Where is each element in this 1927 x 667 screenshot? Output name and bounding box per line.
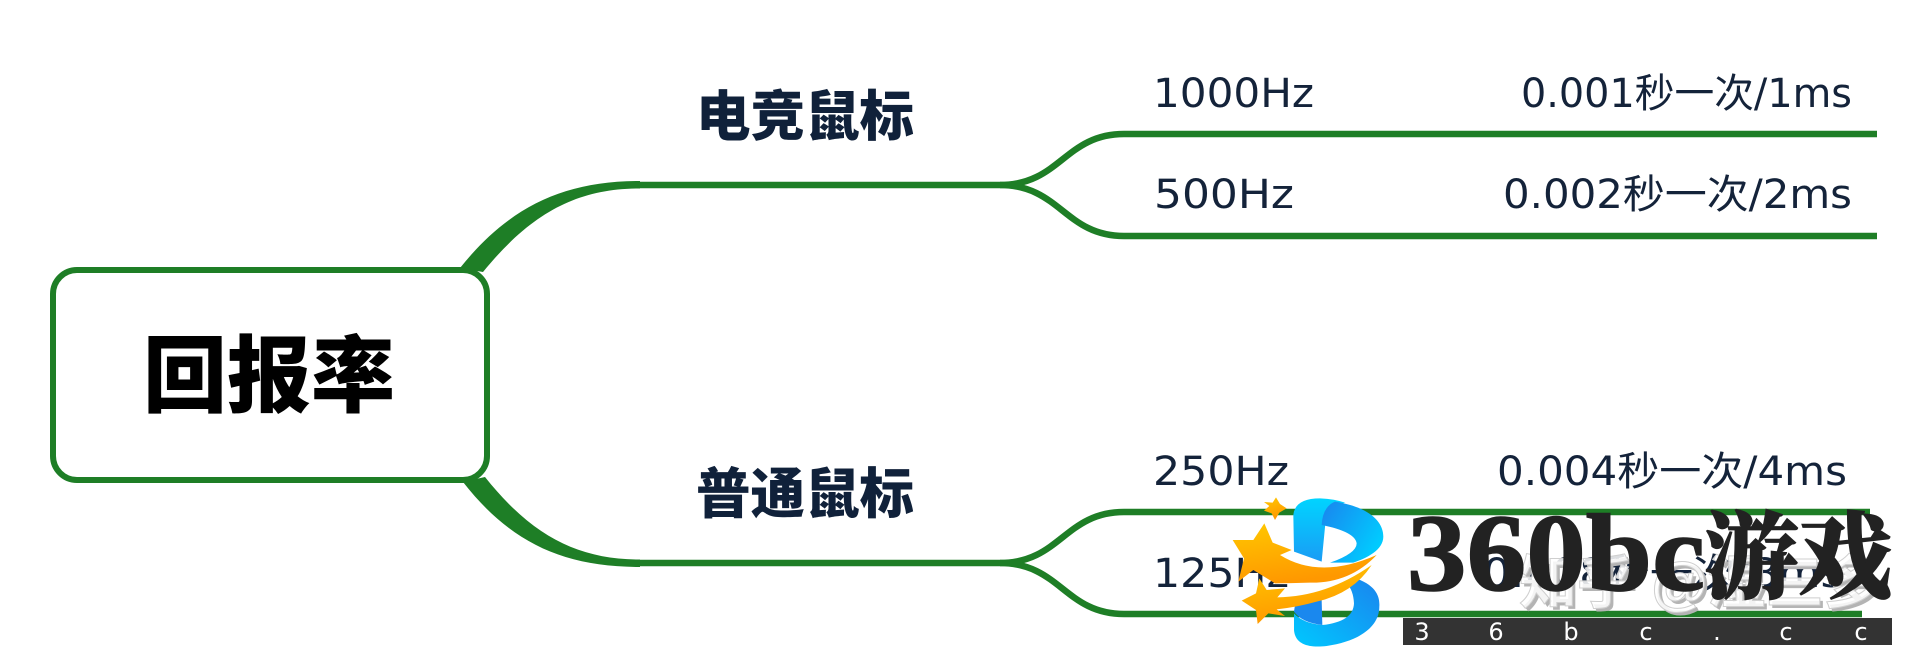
branch: 125Hz line <box>1000 563 1862 614</box>
logo big star <box>1233 523 1377 583</box>
logo bottom fold <box>1294 600 1322 625</box>
logo small star <box>1264 497 1287 520</box>
row: 250Hz: 250Hz <box>1153 449 1289 495</box>
watermark: 360bc游戏: 游戏 <box>1705 482 1892 617</box>
branch: 1000Hz line <box>1000 134 1877 185</box>
watermark: zhihu: 知乎 @湿三多 <box>1519 551 1882 616</box>
logo top-left band <box>1293 498 1345 562</box>
root node: 回报率 <box>53 270 487 480</box>
root node: 回报率: 回报率 <box>143 330 395 424</box>
row: 500Hz: 500Hz <box>1154 172 1294 218</box>
logo lower star <box>1242 565 1372 624</box>
row: 125Hz: 125Hz <box>1153 551 1289 597</box>
watermark: 360bc游戏: 360bc <box>1407 492 1705 614</box>
branch: 250Hz line <box>1000 512 1870 563</box>
logo bottom lobe <box>1294 577 1379 647</box>
heading: 电竞鼠标: 电竞鼠标 <box>696 86 914 148</box>
row value: 0.002: 0.002秒一次/2ms <box>1503 172 1852 218</box>
row value: 0.001: 0.001秒一次/1ms <box>1521 71 1852 117</box>
row value: 0.008: 0.008秒一次/8ms <box>1483 551 1843 597</box>
branch: upper main connector <box>460 181 1000 272</box>
icon: 360bc logo <box>1233 497 1383 647</box>
watermark bar: 36bc.cc: 36bc.cc <box>1414 618 1868 646</box>
watermark: zhihu: 知乎 @湿三多 <box>1522 554 1885 619</box>
branch: 500Hz line <box>1000 185 1877 236</box>
logo top lobe <box>1322 502 1383 563</box>
watermark: 360bc游戏 <box>1407 482 1892 617</box>
branch: lower main connector <box>463 477 1000 567</box>
row: 1000Hz: 1000Hz <box>1153 71 1314 117</box>
row value: 0.004: 0.004秒一次/4ms <box>1497 449 1847 495</box>
heading: 普通鼠标: 普通鼠标 <box>696 464 914 525</box>
